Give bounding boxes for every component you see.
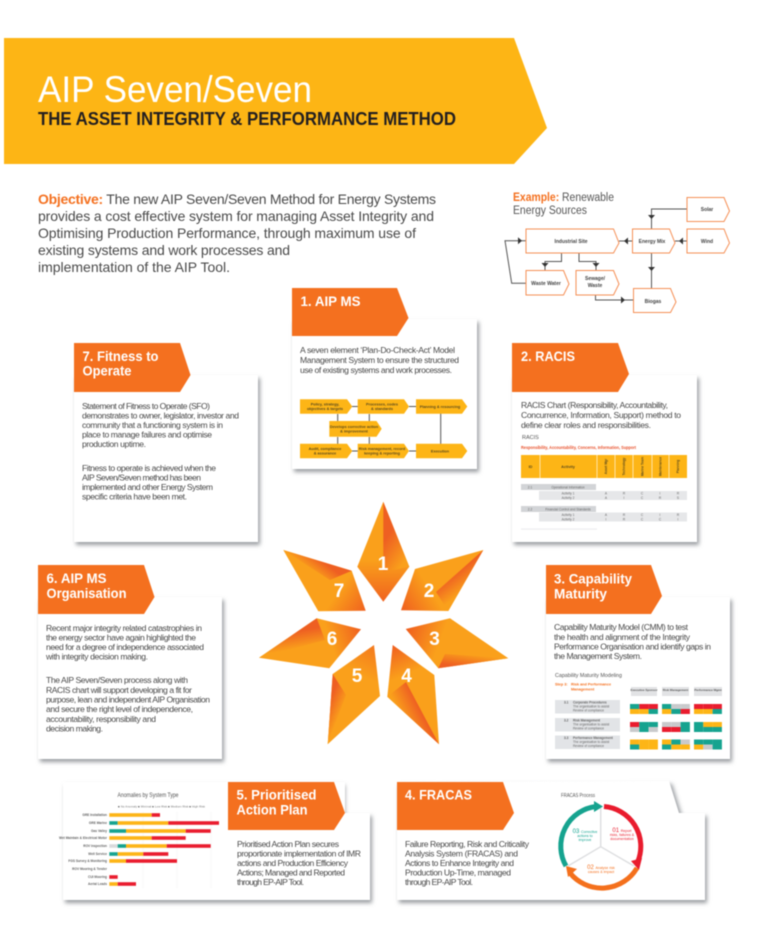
RACIS table: Activity (561, 465, 576, 469)
PDCA flow diagram: keeping & reporting (364, 452, 401, 456)
step labels: documentation (610, 837, 634, 841)
panel text: RACIS chart will support developing a fit for (46, 685, 192, 695)
panel text: the Management System. (554, 651, 642, 661)
RACIS table: I (660, 492, 661, 496)
bar labels: FGS Survey & Monitoring (68, 859, 107, 863)
RACIS table: R (677, 513, 680, 517)
capability maturity heat map: 3.2 (564, 718, 569, 722)
panel text: Performance Organisation and identify gaps in (554, 642, 711, 652)
petal 7: 7 (334, 581, 344, 602)
RACIS table: R (677, 492, 680, 496)
red arc (604, 806, 642, 870)
FRACAS cycle diagram: FRACAS Process (561, 793, 595, 799)
panel text: Capability Maturity Model (CMM) to test (554, 622, 689, 632)
tab heading: 5. Prioritised (236, 786, 316, 802)
tab heading (228, 782, 345, 830)
panel: 1. AIP MS (292, 288, 479, 472)
box: wind (687, 229, 730, 253)
FRACAS cycle diagram (561, 793, 642, 888)
box: sewage / waste: Waste (588, 283, 602, 289)
panel text: Recent major integrity related catastrophies in (46, 623, 202, 633)
PDCA flow diagram: & standards (371, 407, 393, 411)
panel text: AIP Seven/Seven method has been (82, 472, 201, 482)
bar labels: Well Service (88, 852, 107, 856)
tab heading: Maturity (554, 586, 607, 602)
example heading: Energy Sources (513, 205, 587, 217)
title banner (4, 38, 547, 164)
tab heading: 3. Capability (554, 570, 632, 586)
objective text: provides a cost effective system for managing Asset Integrity and (38, 208, 434, 224)
panel: 6. AIP MS Organisation (38, 565, 224, 762)
RACIS table: C (641, 518, 644, 522)
panel text (405, 839, 530, 887)
panel text: purpose, lean and independent AIP Organisation (46, 694, 210, 704)
heat map cells (630, 704, 722, 750)
tab heading: 4. FRACAS (405, 786, 472, 802)
RACIS table: R (659, 496, 662, 500)
RACIS table: Financial Control and Standards (545, 508, 591, 512)
RACIS table: I (624, 496, 625, 500)
PDCA flow diagram: Planning & resourcing (420, 405, 461, 409)
panel: 2. RACIS (512, 343, 699, 545)
panel text: Fitness to operate is achieved when the (82, 463, 216, 473)
rotated column headers: Asset Mgr (604, 458, 608, 474)
rotated column headers: Marine Team (640, 457, 644, 476)
panel text: accountability, responsibility and (46, 714, 156, 724)
RACIS table: R (623, 492, 626, 496)
RACIS table: I (678, 518, 679, 522)
panel text: community that a functioning system is in (82, 420, 223, 430)
capability maturity heat map: Risk Management (663, 688, 688, 692)
petal 2 (401, 550, 483, 611)
RACIS table: I (606, 518, 607, 522)
objective text: existing systems and work processes and (38, 242, 290, 258)
panel text: RACIS Chart (Responsibility, Accountability, (521, 400, 668, 410)
panel text: and secure the right level of independence, (46, 704, 193, 714)
capability maturity heat map: Performance Management (573, 736, 614, 740)
panel text (300, 345, 459, 375)
petal 5: 5 (352, 666, 363, 687)
panel text: actions and Production Efficiency (237, 858, 349, 868)
bar labels (59, 813, 108, 886)
rotated column headers: Maintenance (658, 457, 662, 476)
panel text: through EP-AIP Tool. (237, 877, 304, 887)
step labels: 03 Corrective (573, 829, 597, 835)
RACIS table: R (623, 518, 626, 522)
capability maturity heat map: Corporate Procedures (573, 700, 607, 704)
panel text (554, 622, 711, 661)
petal 4 (387, 645, 439, 744)
tab heading (74, 343, 190, 392)
panel text: decision making. (46, 724, 103, 734)
box: sewage / waste (576, 270, 619, 295)
box: waste water: Waste Water (531, 281, 561, 287)
capability maturity heat map: 3.3 (564, 736, 569, 740)
capability maturity heat map: Capability Maturity Modeling (555, 673, 622, 679)
panel text: specific criteria have been met. (82, 492, 187, 502)
panel text: Statement of Fitness to Operate (SFO) (82, 401, 210, 411)
tab heading (38, 565, 154, 614)
tab heading (512, 343, 629, 392)
bar chart: anomalies by system type (59, 793, 219, 888)
box: waste water (526, 270, 569, 295)
capability maturity heat map: Risk Management (573, 718, 601, 722)
tab heading: Operate (82, 362, 132, 378)
petal 3: 3 (429, 629, 440, 650)
RACIS table: I (660, 513, 661, 517)
panel text: proportionate implementation of IMR (237, 848, 361, 858)
box: solar (687, 198, 730, 222)
rotated column headers (604, 457, 680, 476)
panel text: need for a degree of independence associated (46, 642, 204, 652)
capability maturity heat map: Performance Mgmt (694, 688, 722, 692)
subtitle: THE ASSET INTEGRITY & PERFORMANCE METHOD (38, 109, 456, 129)
capability maturity heat map (555, 673, 722, 750)
panel text: A seven element ‘Plan-Do-Check-Act’ Model (300, 345, 455, 355)
example heading: Example: Renewable (513, 192, 614, 204)
tab heading (546, 565, 662, 614)
panel text: use of existing systems and work processes. (300, 365, 452, 375)
bars (109, 813, 219, 886)
example heading (513, 192, 614, 217)
example: renewable energy sources diagram (505, 192, 730, 312)
step labels: improve (579, 838, 591, 842)
panel text: Prioritised Action Plan secures (237, 839, 339, 849)
PDCA flow diagram: Audit, compliance (309, 447, 341, 451)
RACIS table: C (641, 513, 644, 517)
panel text: Actions to Enhance Integrity and (405, 858, 514, 868)
bar chart: anomalies by system type: ■ No Anomaly ■ Minimal ■ Low Risk ■ Medium Risk ■ High Risk (118, 804, 206, 808)
panel text: place to manage failures and optimise (82, 430, 212, 440)
tab heading: Action Plan (236, 802, 308, 818)
panel text: through EP-AIP Tool. (405, 877, 473, 887)
panel text: the health and alignment of the Integrity (554, 632, 691, 642)
step labels: 01 Report (612, 828, 632, 834)
rotated column headers: Technology (622, 457, 626, 475)
tab heading: 2. RACIS (521, 348, 575, 364)
PDCA flow diagram: & assurance (314, 452, 336, 456)
box: biogas (634, 288, 676, 312)
panel text (82, 401, 239, 502)
RACIS table: RACIS (522, 435, 539, 441)
step labels: risks, failures & (610, 833, 635, 837)
tab heading: 7. Fitness to (82, 348, 158, 364)
capability maturity heat map: Risk and Performance (571, 682, 611, 686)
RACIS table: Activity 1 (562, 513, 575, 517)
petal 5 (328, 645, 380, 744)
panel text: The AIP Seven/Seven process along with (46, 675, 188, 685)
step labels (573, 828, 635, 874)
petal 6 (259, 618, 361, 668)
panel text: Management System to ensure the structured (300, 355, 459, 365)
RACIS table: C (641, 496, 644, 500)
petal 6: 6 (327, 629, 337, 650)
tab heading (397, 782, 514, 830)
panel: 4. FRACAS (397, 781, 707, 903)
box: industrial site: Industrial Site (554, 239, 588, 245)
tab heading: 1. AIP MS (300, 293, 360, 309)
panel text: with integrity decision making. (45, 652, 148, 662)
capability maturity heat map: Executive Sponsor (630, 688, 658, 692)
RACIS table: A (605, 513, 608, 517)
RACIS table: Activity 2 (562, 496, 575, 500)
petal 4: 4 (401, 666, 412, 687)
box: industrial site (526, 229, 619, 253)
panel text: Failure Reporting, Risk and Criticality (405, 839, 530, 849)
step labels: actions to (577, 834, 593, 838)
objective text: Optimising Production Performance, through maximum use of (38, 225, 416, 241)
panel text (521, 400, 681, 430)
flow connectors (505, 209, 687, 304)
orange arc (566, 866, 637, 888)
bar labels: ROV Mooring & Tender (72, 867, 108, 871)
panel: 7. Fitness to Operate (74, 343, 260, 545)
PDCA flow diagram: objectives & targets (307, 407, 343, 411)
bar chart: anomalies by system type: Anomalies by System Type (118, 793, 179, 799)
bar labels: Aerial Leads (88, 882, 107, 886)
panel text: implemented and other Energy System (82, 482, 213, 492)
PDCA flow diagram: Execution (431, 450, 450, 454)
tab heading: 6. AIP MS (46, 570, 106, 586)
capability maturity heat map: The organisation to assist (573, 704, 609, 708)
tab heading: Organisation (46, 585, 126, 601)
capability maturity heat map: Review of compliance (573, 708, 604, 712)
panel: 3. Capability Maturity (546, 565, 732, 762)
panel text: production uptime. (82, 439, 146, 449)
panel text: define clear roles and responsibilities. (521, 420, 651, 430)
RACIS table: C (659, 518, 662, 522)
RACIS table: S (677, 496, 679, 500)
petal 3 (406, 618, 508, 668)
RACIS table: Activity 1 (562, 492, 575, 496)
petal 1 (357, 502, 409, 602)
step labels: 02 Analyse risk (587, 865, 615, 871)
bar labels: GRE Marine (89, 821, 107, 825)
panel: 5. Prioritised Action Plan (59, 782, 372, 903)
capability maturity heat map: The organisation to assist (573, 740, 609, 744)
petal 1: 1 (378, 554, 389, 575)
teal arc (561, 801, 603, 866)
PDCA flow diagram: Policy, strategy, (311, 402, 339, 406)
rotated column headers: Planning (676, 460, 680, 473)
petal 7 (283, 550, 366, 611)
RACIS table: ID (529, 465, 533, 469)
panel text: Concurrence, Information, Support) method to (521, 410, 681, 420)
RACIS table: 2.1 (528, 486, 532, 490)
bar labels: CUI Mooring (88, 875, 107, 879)
PDCA flow diagram (300, 399, 467, 458)
box: sewage / waste: Sewage/ (585, 276, 606, 282)
RACIS table: R (623, 513, 626, 517)
RACIS table: C (641, 492, 644, 496)
objective text: Objective: The new AIP Seven/Seven Method for Energy Systems (38, 191, 436, 207)
box: energy mix (632, 229, 675, 253)
RACIS table: A (605, 492, 608, 496)
box: energy mix: Energy Mix (639, 239, 666, 245)
panel text (237, 839, 361, 887)
RACIS table: A (605, 496, 608, 500)
bar labels: GRE Installation (82, 813, 107, 817)
capability maturity heat map: Management (571, 688, 595, 692)
box: biogas: Biogas (645, 299, 662, 305)
PDCA flow diagram: Develops corrective action (330, 425, 379, 429)
bar labels: ROV Inspection (83, 844, 107, 848)
objective text (38, 191, 436, 275)
panel text: Analysis System (FRACAS) and (405, 848, 518, 858)
RACIS table: Activity 2 (562, 518, 575, 522)
box: solar: Solar (701, 207, 713, 213)
PDCA flow diagram: Processes, codes (366, 402, 398, 406)
bar labels: Wet Maintain & Electrical Motor (59, 836, 108, 840)
PDCA flow diagram: & improvement (340, 430, 369, 434)
panel text: Production Up-Time, managed (405, 868, 511, 878)
RACIS table: Operational Information (551, 486, 585, 490)
capability maturity heat map: The organisation to assist (573, 722, 609, 726)
step labels: causes & impact (588, 870, 614, 874)
RACIS table: 2.2 (528, 508, 532, 512)
capability maturity heat map: Step 3: (555, 682, 568, 686)
PDCA flow diagram: Risk management, record (359, 447, 406, 451)
RACIS table (521, 435, 687, 530)
petal 2: 2 (424, 581, 434, 602)
panel text: Actions; Managed and Reported (237, 868, 345, 878)
panel text: the energy sector have again highlighted the (46, 632, 196, 642)
box: wind: Wind (701, 239, 713, 245)
seven-point star (259, 502, 508, 744)
panel text: demonstrates to owner, legislator, investor and (82, 410, 239, 420)
tab heading (292, 288, 408, 336)
capability maturity heat map: Review of compliance (573, 726, 604, 730)
RACIS table: Responsibility, Accountability, Concerns, Information, Support (521, 445, 636, 450)
capability maturity heat map: Review of compliance (573, 744, 604, 748)
objective text: implementation of the AIP Tool. (38, 259, 230, 275)
capability maturity heat map: 3.1 (564, 700, 569, 704)
panel text (45, 623, 210, 734)
main title: AIP Seven/Seven (38, 69, 312, 110)
bar labels: Gas Valley (91, 829, 107, 833)
